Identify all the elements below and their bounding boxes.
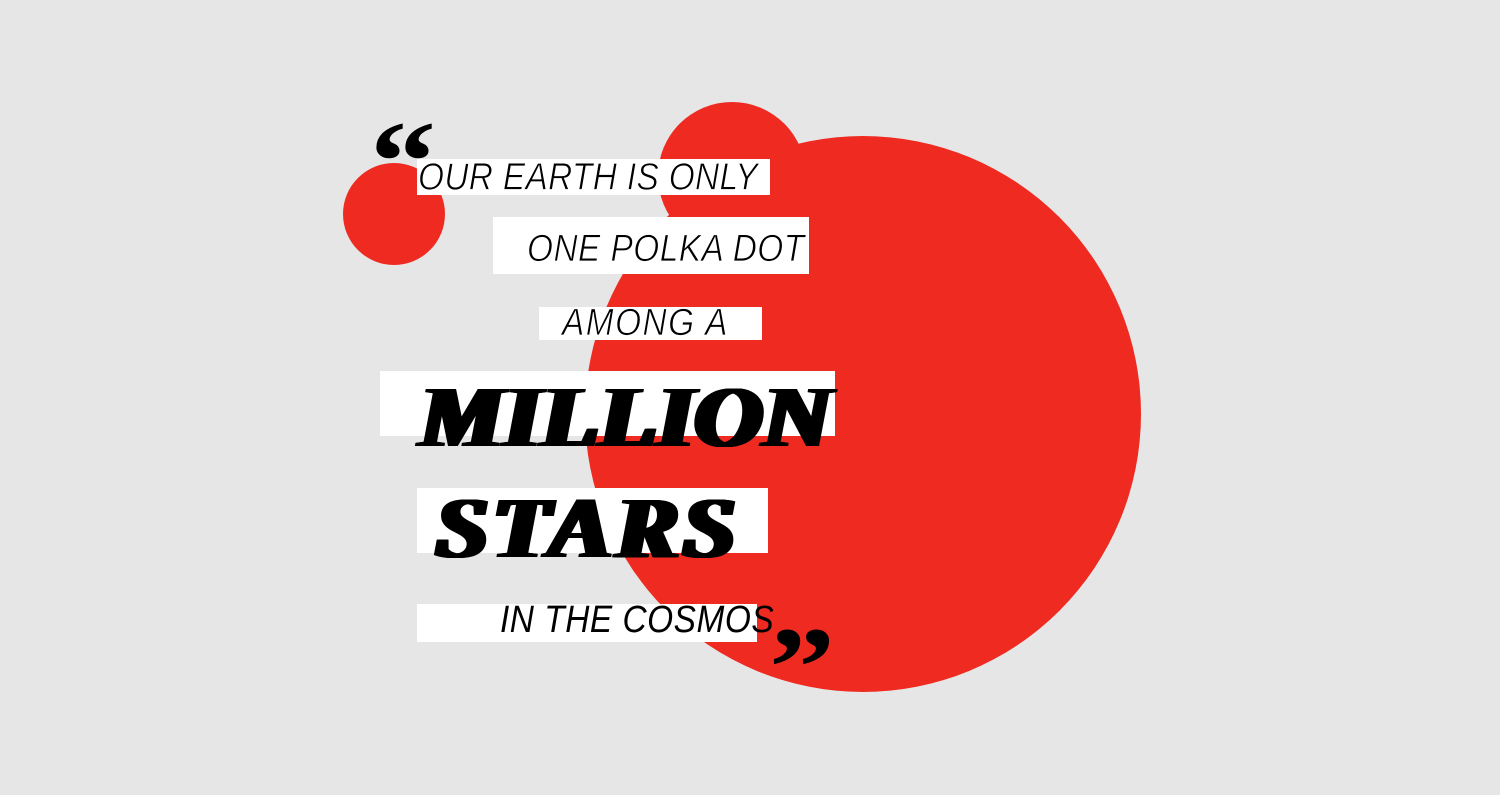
white band: line 5 [417,488,768,553]
white band: line 6 [417,604,757,642]
quote text: one polka dot: ONE POLKA DOT [527,227,806,269]
quote text: million: MILLION [420,368,832,465]
quote text: our earth is only: OUR EARTH IS ONLY [418,156,761,198]
white band: line 4 [380,371,835,436]
small red circle [343,163,445,265]
quote text: stars: STARS [436,479,740,576]
large red circle [585,136,1141,692]
white band: line 3 [539,307,762,340]
medium red circle [658,102,806,250]
closing quotation mark: ” [769,604,835,731]
quote text: in the cosmos: IN THE COSMOS [500,598,774,640]
white band: line 1 [417,159,770,195]
opening quotation mark: “ [370,98,436,225]
white band: line 2 [493,217,809,274]
quote text: among a: AMONG A [560,301,727,343]
